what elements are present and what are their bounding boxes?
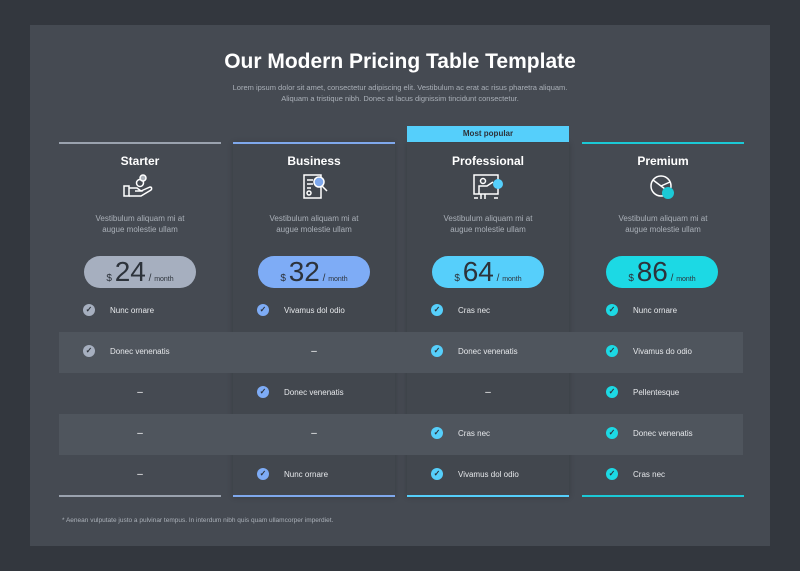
premium features: ✓ xyxy=(609,469,615,478)
text: augue molestie ullam xyxy=(450,225,526,234)
descriptions: augue molestie ullam xyxy=(102,225,178,234)
premium features: Pellentesque xyxy=(633,388,679,397)
text: Vestibulum aliquam mi at xyxy=(619,214,707,223)
starter features: ✓ xyxy=(86,346,92,355)
premium features: Donec venenatis xyxy=(633,429,693,438)
icon: hand with coins xyxy=(123,174,152,197)
premium features xyxy=(606,304,693,480)
shaded row 4 xyxy=(59,414,743,455)
professional features: ✓ xyxy=(434,428,440,437)
bottom lines xyxy=(59,495,221,497)
starter features: Nunc ornare xyxy=(110,306,154,315)
premium features: ✓ xyxy=(609,428,615,437)
subtitle: Lorem ipsum dolor sit amet, consectetur adipiscing elit. Vestibulum ac erat ac risus pharetra aliquam. Aliquam a tristique nibh. Donec at lacus dignissim tincidunt consectetur. xyxy=(233,83,567,103)
professional features: Vivamus dol odio xyxy=(458,470,519,479)
top lines xyxy=(59,142,221,144)
premium features: Nunc ornare xyxy=(633,306,677,315)
starter features xyxy=(83,304,170,480)
business features: Nunc ornare xyxy=(284,470,328,479)
professional features: ✓ xyxy=(434,346,440,355)
premium features: ✓ xyxy=(609,305,615,314)
professional features: ✓ xyxy=(434,305,440,314)
business features: ✓ xyxy=(260,387,266,396)
starter features: – xyxy=(137,428,143,439)
professional features: Cras nec xyxy=(458,306,490,315)
business features: Vivamus dol odio xyxy=(284,306,345,315)
text: Professional xyxy=(452,154,524,168)
text: Business xyxy=(287,154,341,168)
most popular badge: Most popular xyxy=(463,129,513,138)
starter features: ✓ xyxy=(86,305,92,314)
business features xyxy=(257,304,345,480)
starter features: – xyxy=(137,469,143,480)
icon: pie chart xyxy=(650,175,674,199)
starter features: – xyxy=(137,387,143,398)
icon: document magnifier xyxy=(303,174,328,199)
business features: Donec venenatis xyxy=(284,388,344,397)
text: $ 64 / month xyxy=(454,256,522,287)
premium features: Vivamus do odio xyxy=(633,347,692,356)
footnote: * Aenean vulputate justo a pulvinar tempus. In interdum nibh quis quam ullamcorper imperdiet. xyxy=(62,517,333,524)
text: Vestibulum aliquam mi at xyxy=(444,214,532,223)
text: $ 86 / month xyxy=(628,256,696,287)
price pills: $ 24 / month xyxy=(106,256,174,287)
text: Premium xyxy=(637,154,689,168)
price pills xyxy=(84,256,196,288)
professional features: ✓ xyxy=(434,469,440,478)
professional features: – xyxy=(485,387,491,398)
descriptions xyxy=(96,214,184,234)
title: Our Modern Pricing Table Template xyxy=(224,50,576,73)
descriptions: Vestibulum aliquam mi at xyxy=(96,214,184,223)
most popular badge xyxy=(407,126,569,142)
business features: ✓ xyxy=(260,469,266,478)
starter features: Donec venenatis xyxy=(110,347,170,356)
professional features: Donec venenatis xyxy=(458,347,518,356)
text: Vestibulum aliquam mi at xyxy=(270,214,358,223)
business features: – xyxy=(311,428,317,439)
plan names: Starter xyxy=(121,154,159,168)
business features: ✓ xyxy=(260,305,266,314)
premium features: Cras nec xyxy=(633,470,665,479)
text: augue molestie ullam xyxy=(625,225,701,234)
shaded row 2 xyxy=(59,332,743,373)
column shading: business xyxy=(233,143,395,497)
column shading: professional xyxy=(407,143,569,497)
text: $ 32 / month xyxy=(280,256,348,287)
icon: presenter xyxy=(473,174,503,199)
business features: – xyxy=(311,346,317,357)
professional features xyxy=(431,304,519,480)
text: augue molestie ullam xyxy=(276,225,352,234)
premium features: ✓ xyxy=(609,346,615,355)
professional features: Cras nec xyxy=(458,429,490,438)
premium features: ✓ xyxy=(609,387,615,396)
